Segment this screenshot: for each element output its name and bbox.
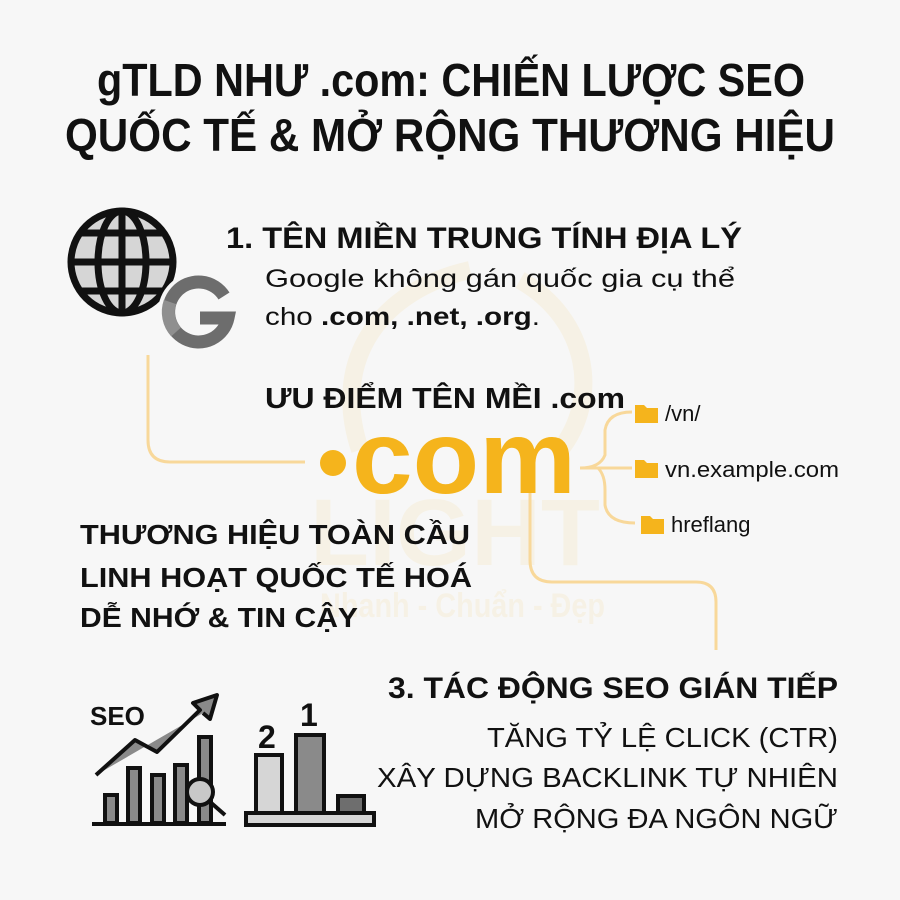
text block 3: MỞ RỘNG ĐA NGÔN NGỮ (475, 802, 838, 834)
left benefits list: THƯƠNG HIỆU TOÀN CẦU (80, 519, 470, 550)
icon: ranking podium: 2 (258, 719, 276, 755)
watermark logo (310, 270, 605, 625)
text block 1: Google không gán quốc gia cụ thể (265, 265, 735, 293)
left benefits list: LINH HOẠT QUỐC TẾ HOÁ (80, 561, 472, 593)
title: QUỐC TẾ & MỞ RỘNG THƯƠNG HIỆU (65, 109, 835, 161)
folder list: vn.example.com (665, 457, 839, 482)
left benefits list (80, 519, 472, 633)
text block 1: cho .com, .net, .org . (265, 303, 540, 331)
watermark logo: Nhanh - Chuẩn - Đẹp (320, 587, 605, 625)
icon: SEO growth chart (90, 695, 226, 824)
heading 1: 1. TÊN MIỀN TRUNG TÍNH ĐỊA LÝ (226, 221, 742, 255)
folder list: hreflang (671, 512, 751, 537)
watermark logo: LIGHT (310, 480, 600, 586)
title (65, 54, 835, 161)
title: gTLD NHƯ .com: CHIẾN LƯỢC SEO (97, 54, 805, 106)
icon: globe (71, 211, 173, 313)
icon: ranking podium: 1 (300, 697, 318, 733)
left benefits list: DỄ NHỚ & TIN CẬY (80, 602, 358, 633)
heading: advantages: ƯU ĐIỂM TÊN MỀI .com (265, 381, 625, 415)
heading 3: 3. TÁC ĐỘNG SEO GIÁN TIẾP (388, 671, 838, 705)
folder list: /vn/ (665, 401, 701, 426)
connector lines (148, 355, 716, 650)
folder list (635, 401, 839, 537)
text block 1 (265, 265, 735, 331)
big .com: com (352, 400, 576, 516)
text block 3: TĂNG TỶ LỆ CLICK (CTR) (487, 721, 838, 753)
icon: G logo (158, 272, 238, 352)
text block 3 (377, 721, 838, 834)
icon: SEO growth chart: SEO (90, 701, 145, 731)
icon: ranking podium (246, 697, 374, 825)
text block 3: XÂY DỰNG BACKLINK TỰ NHIÊN (377, 762, 838, 793)
